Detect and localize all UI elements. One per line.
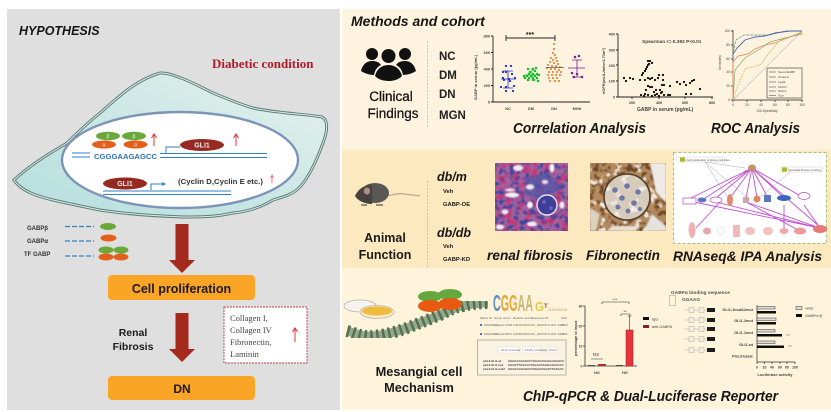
legend: GABP subunits: GABPβ <box>27 226 48 232</box>
chart: ROC curves: 20 <box>726 84 730 88</box>
chart: ROC curves: 60 <box>773 103 777 107</box>
chart: ChIP-qPCR bars: NS <box>593 352 599 358</box>
chart: serum GABP scatter: 800 <box>484 34 490 38</box>
sequence logo: GAGGCG <box>548 307 567 312</box>
chart: ROC curves: Legl3 <box>778 80 786 84</box>
GABP complex on DNA: β <box>133 134 136 140</box>
animal groups: GABP-KD <box>443 257 470 263</box>
panel: animal function <box>342 150 831 270</box>
label: renal fibrosis <box>113 327 154 353</box>
ChIP table and alignment: Start <box>561 316 568 320</box>
nucleus <box>62 112 298 208</box>
cell with nucleus <box>14 73 327 217</box>
chart: ROC curves: 40 <box>759 103 763 107</box>
heading: methods and cohort: Methods and cohort <box>351 13 486 29</box>
image: fibronectin histology <box>590 163 666 231</box>
chart: serum GABP scatter: 600 <box>484 51 490 55</box>
chart: correlation scatter: 100 <box>609 80 615 84</box>
caption: ROC analysis: ROC Analysis <box>711 121 800 137</box>
panel: hypothesis <box>7 9 340 410</box>
chart: ChIP-qPCR bars: anti-GABPA <box>652 325 673 329</box>
ChIP table and alignment: 6.9871 <box>503 332 513 336</box>
GLI1 oval: GLI1 <box>117 181 133 188</box>
box: fibrosis markers: Laminin <box>230 349 260 359</box>
red up arrow <box>152 134 156 146</box>
box: DN <box>108 376 255 400</box>
sequence logo: T <box>544 304 548 310</box>
icon: mouse <box>355 183 420 205</box>
ChIP table and alignment: MA0062.2 <box>484 332 498 336</box>
ChIP table and alignment: MA0062.1 <box>484 323 498 327</box>
GABP complex on DNA: α <box>134 142 137 148</box>
cohort groups: MGN <box>439 110 466 122</box>
animal groups: GABP-OE <box>443 202 470 208</box>
cohort groups <box>439 51 466 122</box>
ChIP table and alignment: Relative score <box>513 316 532 320</box>
chart: correlation scatter: 800 <box>709 101 715 105</box>
chart: ROC curves: Sensitivity <box>718 55 722 70</box>
label: renal fibrosis: Renal <box>119 327 147 339</box>
caption: renal fibrosis: renal fibrosis <box>487 247 573 263</box>
animal groups <box>437 170 471 263</box>
box: fibrosis markers <box>224 307 307 363</box>
label: diabetic condition: Diabetic condition <box>212 56 314 71</box>
chart: serum GABP scatter: DN <box>551 107 557 111</box>
ChIP table and alignment: pGL3-GLI1-mut <box>483 363 503 367</box>
chart: ROC curves: SCCN <box>778 85 787 89</box>
label: mesangial cell mechanism: Mesangial cell <box>376 364 462 379</box>
chart: ROC curves: 20 <box>745 103 749 107</box>
animal groups: Veh <box>443 189 454 195</box>
ChIP table and alignment: GGGGTTGAGCCTGGACCGGGAAGAGCC <box>508 363 564 367</box>
DNA with binding sequence <box>72 147 267 161</box>
GABP complex on DNA: β <box>107 134 110 140</box>
label: clinical findings: Findings <box>367 106 419 121</box>
chart: correlation scatter <box>601 32 715 113</box>
box: fibrosis markers: Collagen IV <box>230 325 273 335</box>
ChIP table and alignment: PolyA <box>549 348 557 352</box>
caption: correlation analysis: Correlation Analysis <box>513 121 646 137</box>
ChIP table and alignment: pGL3-GLI1-mut2 <box>483 367 505 371</box>
chart: luciferase reporter: Luciferase activity <box>758 372 793 377</box>
chart: ROC curves: 80 <box>786 103 790 107</box>
ChIP table and alignment: 7.3366 <box>503 323 513 327</box>
ChIP table and alignment <box>478 316 568 375</box>
chart: serum GABP scatter: DM <box>528 107 534 111</box>
promoter and DNA <box>103 182 231 194</box>
ChIP table and alignment: NC_000076.6:1197-9426 <box>531 332 565 336</box>
ChIP table and alignment: 1010 <box>561 323 568 327</box>
cohort groups: DN <box>439 89 456 101</box>
box: cell proliferation: Cell proliferation <box>132 282 231 296</box>
cohort groups: DM <box>439 70 457 82</box>
chart: ROC curves: 100 <box>724 29 730 33</box>
chart: serum GABP scatter: 200 <box>484 84 490 88</box>
chart: ChIP-qPCR bars: *** <box>613 297 618 302</box>
panel: mesangial cell mechanism <box>342 268 831 410</box>
ChIP table and alignment: Sequence ID <box>531 316 549 320</box>
heading: hypothesis: HYPOTHESIS <box>19 24 100 38</box>
ChIP table and alignment: Firefly Luciferase <box>525 348 548 352</box>
chart: correlation scatter: Spearman r=-0.392 P<0.01 <box>642 39 702 45</box>
image: renal fibrosis histology <box>495 163 568 231</box>
chart: luciferase reporter: GLI1-1mut <box>734 331 754 335</box>
label: animal function <box>359 231 411 262</box>
icon: DNA helix <box>347 303 488 336</box>
chart: serum GABP scatter: NC <box>505 107 511 111</box>
cohort groups: NC <box>439 51 456 63</box>
chart: ChIP-qPCR bars <box>574 297 673 375</box>
diagram: IPA network: Interstitial fibrosis of kidney <box>788 168 822 172</box>
chart: luciferase reporter: GLI1-wt <box>739 343 754 347</box>
ChIP table and alignment: 0.864238134 <box>513 323 531 327</box>
chart: ROC curves: 80 <box>726 43 730 47</box>
chart: correlation scatter: 300 <box>609 48 615 52</box>
chart: luciferase reporter: 80 <box>785 366 789 370</box>
chart: ChIP-qPCR bars: IgG <box>652 318 658 322</box>
chart: luciferase reporter <box>670 290 823 377</box>
chart: luciferase reporter: 100 <box>792 366 798 370</box>
chart: ROC curves: SCUA <box>778 89 786 93</box>
ChIP table and alignment: NC_000076.6:1197-9426 <box>531 323 565 327</box>
GABP complex on DNA <box>92 132 148 148</box>
chart: correlation scatter: 400 <box>609 32 615 36</box>
label: renal fibrosis: Fibrosis <box>113 341 154 353</box>
chart: correlation scatter: 200 <box>629 101 635 105</box>
ChIP table and alignment: GGGGAAGAGCCTGGACCGGGTTGAGCC <box>508 367 564 371</box>
ChIP table and alignment: Score <box>503 316 511 320</box>
chart: serum GABP scatter: MGN <box>573 107 582 111</box>
chart: luciferase reporter: PGL3-basic <box>732 354 753 358</box>
chart: luciferase reporter: GLI1-2mut <box>734 319 754 323</box>
chart: luciferase reporter: GLI1-1mut&2mut <box>722 308 754 312</box>
chart: ChIP-qPCR bars: 30 <box>579 304 583 308</box>
chart: ROC curves: UrineLA <box>778 75 789 79</box>
chart: luciferase reporter: GABPα binding sequence <box>671 290 730 296</box>
GLI1 oval <box>180 139 224 151</box>
ChIP table and alignment: 1142 <box>561 332 568 336</box>
chart: luciferase reporter: 60 <box>778 366 782 370</box>
label: animal function: Animal <box>364 231 406 245</box>
chart: luciferase reporter: vetor <box>805 306 814 310</box>
chart: ChIP-qPCR bars: NG <box>594 371 600 375</box>
legend: GABP subunits <box>24 223 128 260</box>
chart: correlation scatter: eGFR(mL/L/min×1.73m²) <box>601 47 606 94</box>
chart: serum GABP scatter: GABP in serum (pg/mL) <box>473 54 478 100</box>
chart: ChIP-qPCR bars: HG <box>622 371 628 375</box>
label: animal function: Function <box>359 248 411 262</box>
chart: luciferase reporter: 0 <box>756 366 758 370</box>
box: cell proliferation <box>108 275 255 300</box>
chart: luciferase reporter: GABPα+β <box>805 314 823 318</box>
chart: ROC curves: 100 <box>799 103 805 107</box>
arrow: to cell proliferation <box>169 224 195 273</box>
animal groups: db/m <box>437 170 467 184</box>
ChIP table and alignment: pGL3-GLI1-wt <box>483 359 501 363</box>
GLI1 oval <box>103 178 147 190</box>
animal groups: Veh <box>443 244 454 250</box>
chart: ROC curves: 0 <box>732 103 734 107</box>
chart: ROC curves: SerumGABP <box>778 70 795 74</box>
chart: correlation scatter: GABP in serum (pg/mL) <box>637 107 694 113</box>
GABP complex <box>418 289 462 312</box>
chart: ROC curves <box>718 29 805 113</box>
label: mesangial cell mechanism <box>376 364 462 395</box>
chart: ROC curves: 0 <box>728 98 730 102</box>
box: fibrosis markers: Fibronectin, <box>230 337 271 347</box>
chart: correlation scatter: 0 <box>613 96 615 100</box>
chart: ChIP-qPCR bars: 20 <box>579 324 583 328</box>
chart: ChIP-qPCR bars: 10 <box>579 344 583 348</box>
box: DN: DN <box>173 382 191 396</box>
chart: serum GABP scatter: *** <box>526 32 534 39</box>
GLI1 oval: GLI1 <box>194 142 210 150</box>
chart: ROC curves: 40 <box>726 70 730 74</box>
caption: RNAseq and IPA analysis: RNAseq& IPA Analysis <box>673 248 822 264</box>
diagram: IPA network: Cell proliferation of kidney cell lines <box>686 158 730 162</box>
icon: petri dishes <box>344 300 394 318</box>
legend: GABP subunits: GABPα <box>27 239 48 245</box>
label: mesangial cell mechanism: Mechanism <box>384 380 454 395</box>
chart: luciferase reporter: GGAAG <box>682 297 700 303</box>
ChIP table and alignment: Matrix ID <box>480 316 493 320</box>
icon: people <box>361 48 416 81</box>
GABP complex on DNA: α <box>103 142 106 148</box>
animal groups: db/db <box>437 226 471 240</box>
chart: ROC curves: 100-Specificity <box>756 109 778 113</box>
diagram: IPA network <box>674 152 827 244</box>
chart: serum GABP scatter: 400 <box>484 68 490 72</box>
chart: luciferase reporter: 40 <box>770 366 774 370</box>
panel: methods and cohort <box>342 9 831 150</box>
ChIP table and alignment: GLI1 promoter <box>501 348 520 352</box>
chart: correlation scatter: 400 <box>656 101 662 105</box>
ChIP table and alignment: 0.835528104 <box>513 332 531 336</box>
chart: correlation scatter: 600 <box>682 101 688 105</box>
target genes: (Cyclin D,Cyclin E etc.) <box>178 177 264 186</box>
chart: ROC curves: 60 <box>726 57 730 61</box>
chart: ChIP-qPCR bars: percentage to Input <box>574 320 578 356</box>
label: clinical findings: Clinical <box>369 89 413 104</box>
sequence logo: CGGAA <box>493 290 533 316</box>
arrow: to DN <box>169 313 195 362</box>
ChIP table and alignment: Name <box>494 316 502 320</box>
chart: serum GABP scatter <box>473 32 590 111</box>
chart: serum GABP scatter: 0 <box>488 100 490 104</box>
red up arrow <box>234 134 238 146</box>
chart: ChIP-qPCR bars: 0 <box>581 364 583 368</box>
red up arrow <box>270 175 274 183</box>
caption: ChIP-qPCR and dual-luciferase reporter: ChIP-qPCR & Dual-Luciferase Reporter <box>523 389 779 405</box>
caption: fibronectin: Fibronectin <box>586 247 660 263</box>
DNA with binding sequence: CGGGAAGAGCC <box>94 152 158 161</box>
sequence logo: G <box>535 299 544 314</box>
ChIP table and alignment: GGGGAAGAGCCTGGACCGGGAAGAGCC <box>508 359 564 363</box>
chart: correlation scatter: 200 <box>609 64 615 68</box>
chart: ROC curves: Tcor <box>778 94 784 98</box>
ChIP table and alignment: Gabpa <box>494 332 503 336</box>
legend: GABP subunits: TF GABP <box>24 252 50 258</box>
chart: luciferase reporter: 20 <box>763 366 766 370</box>
box: fibrosis markers: Collagen I, <box>230 313 268 323</box>
ChIP table and alignment: Gabpa <box>494 323 503 327</box>
chart: ChIP-qPCR bars: ** <box>623 309 627 314</box>
label: clinical findings <box>367 89 419 121</box>
